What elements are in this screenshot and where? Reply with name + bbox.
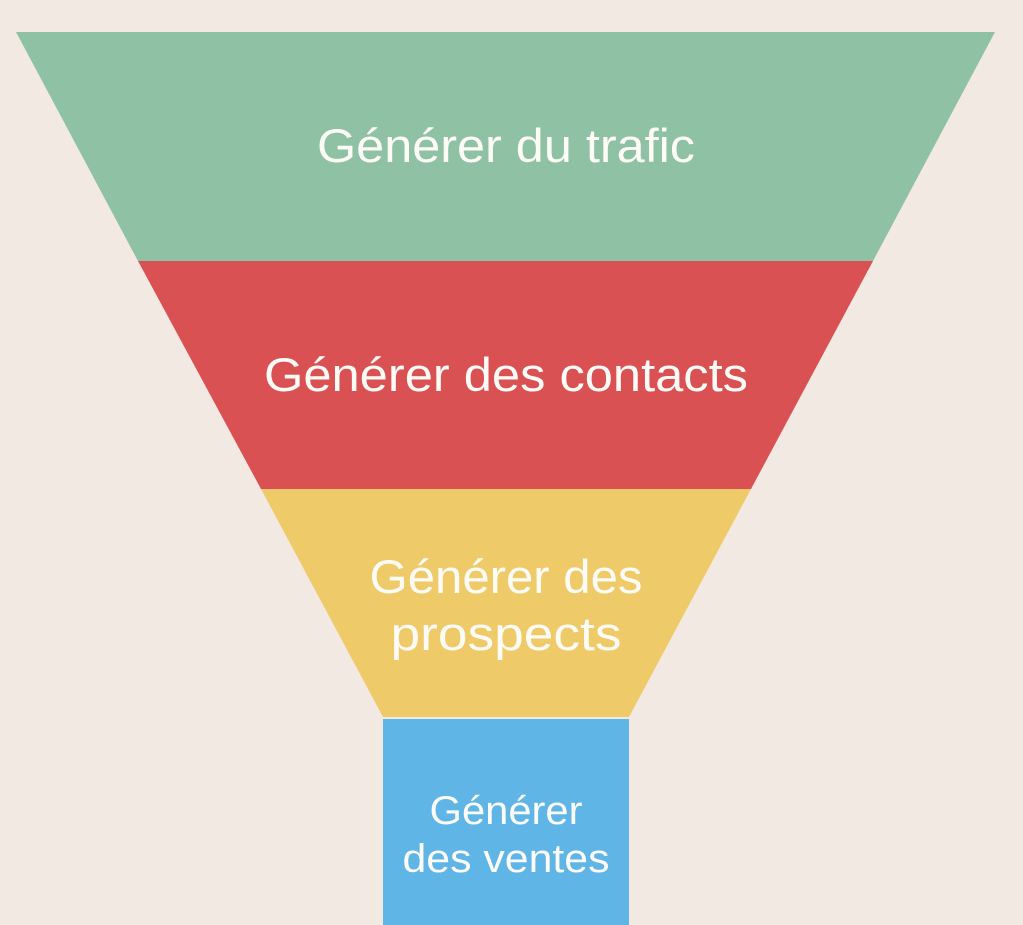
label: Générer des contacts: Générer des contacts bbox=[264, 348, 748, 401]
funnel stage 4: sales bbox=[383, 719, 629, 925]
funnel stage 4: sales: des ventes bbox=[402, 837, 610, 881]
label: Générer du trafic: Générer du trafic bbox=[317, 119, 695, 172]
funnel stage 3: prospects: prospects bbox=[390, 607, 622, 660]
funnel stage 2: contacts bbox=[138, 261, 873, 489]
label: Générer des ventes: Générer bbox=[430, 789, 582, 833]
funnel stage 1: traffic bbox=[16, 32, 995, 261]
funnel stage 3: prospects bbox=[261, 489, 751, 717]
label: Générer des prospects: Générer des bbox=[370, 550, 642, 603]
